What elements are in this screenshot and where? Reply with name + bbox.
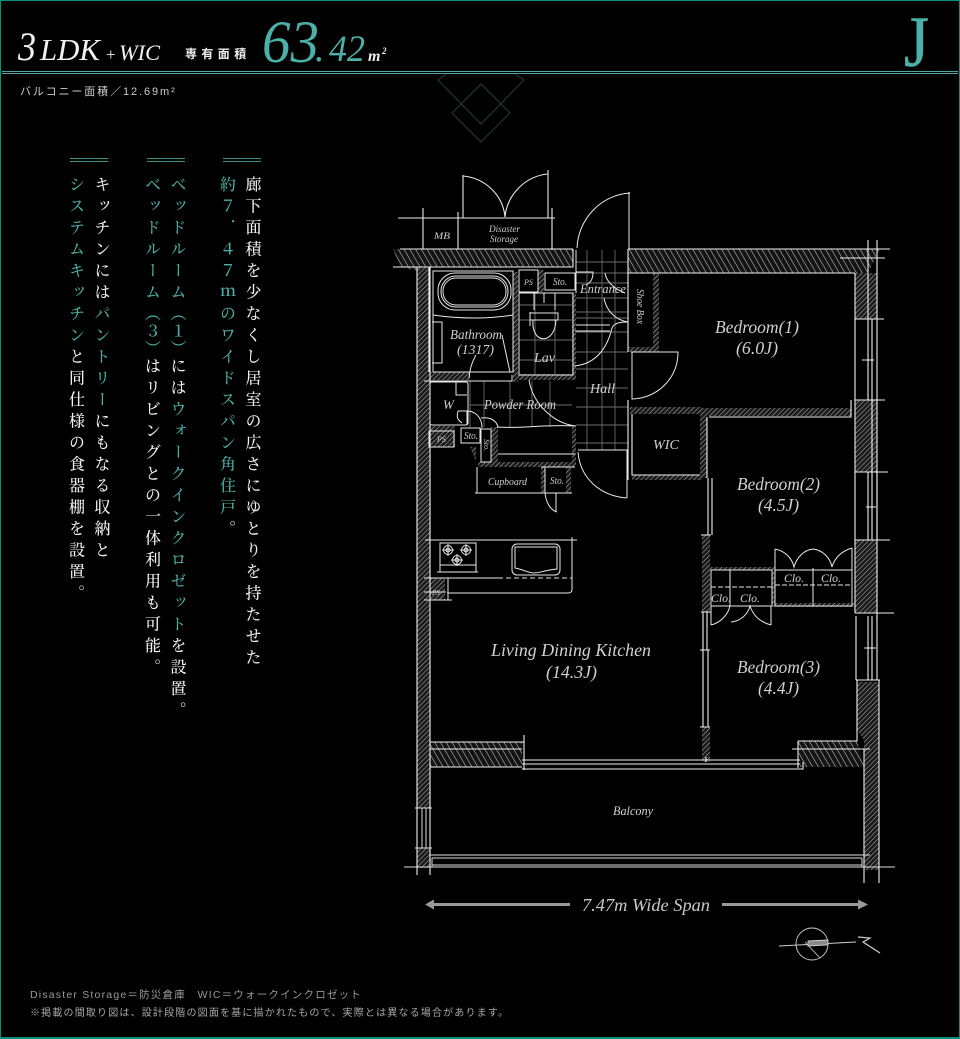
rule: text block 1: [223, 158, 261, 162]
room labels: Bedroom(1): [715, 317, 799, 338]
rule: text block 2: [147, 158, 185, 162]
tile grid: [470, 250, 629, 450]
area unit: m: [368, 48, 380, 65]
title: layout type: [17, 24, 160, 69]
type letter J: J: [904, 2, 929, 82]
title: layout type: WIC: [119, 40, 160, 65]
area value: .: [315, 28, 324, 70]
title: layout type: LDK: [39, 32, 102, 67]
room labels: Bathroom: [450, 327, 502, 342]
structural walls: [393, 249, 880, 870]
room labels: MB: [433, 232, 450, 242]
area unit: [368, 46, 387, 65]
room labels: W: [443, 397, 455, 412]
room labels: Clo.: [711, 591, 731, 605]
room labels: WIC: [653, 438, 680, 453]
room labels: Sto.: [553, 277, 567, 288]
room labels: Clo.: [821, 571, 841, 585]
room labels: Living Dining Kitchen: [490, 640, 651, 660]
floor plan: [393, 170, 895, 883]
balcony area: バルコニー面積／12.69m²: [20, 84, 177, 98]
room labels: PS: [431, 589, 440, 597]
room labels: Powder Room: [483, 397, 556, 412]
entrance door: [573, 192, 630, 331]
room labels: Hall: [589, 382, 615, 397]
text block: kitchen: システムキッチン と同仕様の食器棚を設置。: [66, 176, 84, 606]
room labels: Bedroom(3): [737, 657, 820, 678]
room labels: Sto.: [482, 439, 491, 451]
text block: bedrooms: ベッドルーム （１） には ウォークインクロゼット を設置。: [168, 176, 185, 723]
area value: 63: [262, 9, 319, 75]
room labels: Entrance: [579, 281, 626, 296]
room labels: (4.5J): [758, 495, 799, 516]
area unit: 2: [381, 46, 387, 56]
wide span label: 7.47m Wide Span: [582, 895, 710, 915]
bathroom fixtures: [424, 271, 513, 381]
text block: kitchen: [66, 176, 110, 606]
room labels: Balcony: [613, 803, 653, 818]
room labels: (6.0J): [736, 338, 778, 359]
room labels: (4.4J): [758, 678, 799, 699]
room labels: PS: [436, 435, 446, 444]
rule: text block 3: [70, 158, 108, 162]
lavatory fixtures: [519, 270, 628, 375]
hall door: [578, 450, 627, 498]
room labels: Storage: [490, 235, 518, 245]
room labels: Clo.: [784, 571, 804, 585]
text block: wide span corridor: 約７．４７ｍのワイドスパン角住戸 。: [218, 176, 234, 542]
room labels: Sto.: [464, 431, 478, 442]
arrow: wide span left: [425, 900, 570, 910]
text block: bedrooms: ベッドルーム （３） はリビングとの一体利用も可能。: [142, 176, 160, 680]
header rules: [2, 72, 958, 74]
text block: bedrooms: [142, 176, 186, 723]
wall outlines: [393, 240, 894, 883]
WIC door: [631, 352, 678, 399]
room labels: Shoe Box: [634, 289, 645, 325]
text block: kitchen: キッチンには パントリー にもなる収納と: [92, 176, 109, 563]
text block: wide span corridor: 廊下面積を少なくし居室の広さにゆとりを持たせた: [243, 176, 260, 670]
room labels: Lav: [533, 351, 556, 366]
powder room and storage: [429, 380, 576, 462]
area value: [262, 9, 365, 75]
disaster storage and MB: [398, 170, 555, 250]
room labels: Cupboard: [488, 477, 528, 488]
title: layout type: +: [106, 45, 116, 64]
balcony rail: [404, 808, 895, 867]
decorative diamonds: [438, 74, 524, 142]
arrow: wide span right: [722, 900, 868, 910]
text block: wide span corridor: [218, 176, 261, 670]
room labels: PS: [523, 278, 533, 287]
title: layout type: 3: [17, 24, 36, 69]
cupboard and storage: [475, 467, 575, 512]
room labels: Disaster: [488, 225, 520, 235]
room labels: Clo.: [740, 591, 760, 605]
area value: 42: [329, 29, 365, 70]
label: exclusive area: 専有面積: [185, 46, 251, 61]
room labels: (1317): [457, 342, 495, 357]
footnote: disclaimer: ※掲載の間取り図は、設計段階の図面を基に描かれたもので、実際とは異なる場合があります。: [30, 1006, 508, 1019]
icon: north compass: [779, 928, 880, 960]
kitchen counter: [424, 537, 577, 600]
closets: [711, 548, 852, 625]
room labels: Sto.: [550, 476, 564, 487]
room labels: (14.3J): [546, 662, 597, 683]
room labels: Bedroom(2): [737, 474, 820, 495]
room labels: [431, 225, 841, 818]
footnote: abbreviations: Disaster Storage＝防災倉庫 WIC＝ウォークインクロゼット: [30, 988, 362, 1001]
